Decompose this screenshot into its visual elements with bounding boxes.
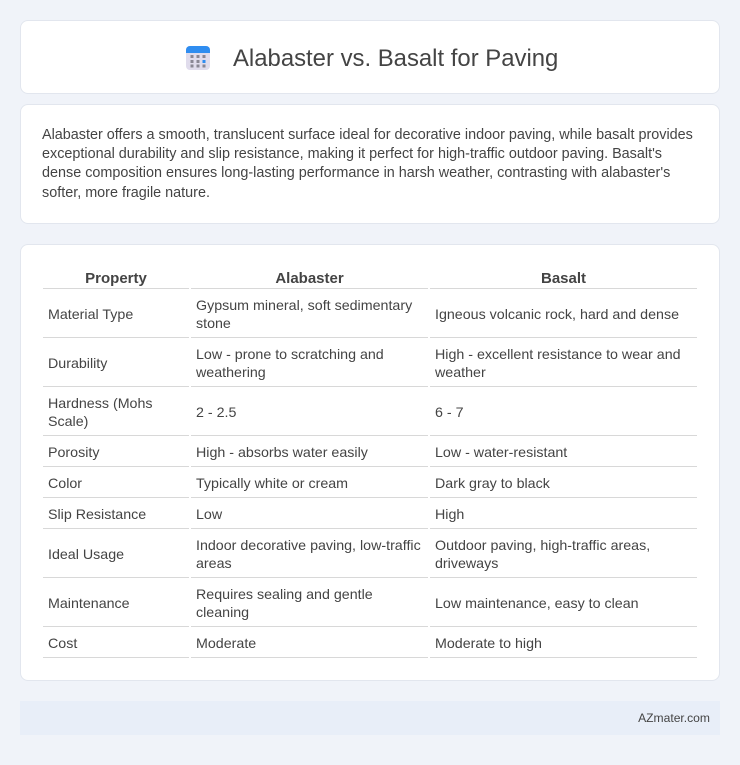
comparison table: Low [196, 507, 222, 523]
comparison table: Durability [48, 356, 107, 372]
footer [20, 701, 720, 735]
description text [42, 127, 693, 201]
comparison table: 6 - 7 [435, 405, 464, 421]
panel: header [20, 20, 720, 94]
description text: dense composition ensures long-lasting performance in harsh weather, contrasting with alabaster's [42, 165, 670, 181]
comparison table: High - absorbs water easily [196, 445, 368, 461]
comparison table: Slip Resistance [48, 507, 146, 523]
footer brand: AZmater.com [638, 711, 710, 725]
description text: softer, more fragile nature. [42, 185, 210, 201]
comparison table: Property [85, 270, 147, 287]
comparison table: cleaning [196, 605, 249, 621]
comparison table: Typically white or cream [196, 476, 348, 492]
comparison table: Maintenance [48, 596, 130, 612]
icon: calendar [186, 46, 210, 70]
comparison table: Basalt [541, 270, 586, 287]
comparison table: weathering [196, 365, 266, 381]
comparison table: Moderate to high [435, 636, 542, 652]
comparison table: Indoor decorative paving, low-traffic [196, 538, 421, 554]
comparison table [43, 270, 697, 658]
comparison table: stone [196, 316, 231, 332]
comparison table: 2 - 2.5 [196, 405, 236, 421]
comparison table: Igneous volcanic rock, hard and dense [435, 307, 679, 323]
description text: exceptional durability and slip resistance, making it perfect for high-traffic outdoor paving. Basalt's [42, 146, 662, 162]
comparison table: driveways [435, 556, 498, 572]
title: Alabaster vs. Basalt for Paving [233, 45, 558, 72]
comparison table: weather [435, 365, 486, 381]
comparison table: High [435, 507, 464, 523]
comparison table: Ideal Usage [48, 547, 124, 563]
comparison table: Color [48, 476, 82, 492]
comparison table: Gypsum mineral, soft sedimentary [196, 298, 412, 314]
comparison table: Scale) [48, 414, 88, 430]
comparison table: Requires sealing and gentle [196, 587, 373, 603]
comparison table: Low - water-resistant [435, 445, 567, 461]
comparison table: Cost [48, 636, 77, 652]
panel: comparison table [20, 244, 720, 681]
comparison table: Outdoor paving, high-traffic areas, [435, 538, 650, 554]
comparison table: Alabaster [275, 270, 344, 287]
description text: Alabaster offers a smooth, translucent surface ideal for decorative indoor paving, while basalt provides [42, 127, 693, 143]
panel: description [20, 104, 720, 224]
comparison table: Dark gray to black [435, 476, 550, 492]
comparison table: Hardness (Mohs [48, 396, 153, 412]
comparison table: Material Type [48, 307, 133, 323]
comparison table: Low maintenance, easy to clean [435, 596, 639, 612]
comparison table: Low - prone to scratching and [196, 347, 384, 363]
comparison table: areas [196, 556, 232, 572]
comparison table: Porosity [48, 445, 99, 461]
comparison table: High - excellent resistance to wear and [435, 347, 681, 363]
comparison table: Moderate [196, 636, 256, 652]
